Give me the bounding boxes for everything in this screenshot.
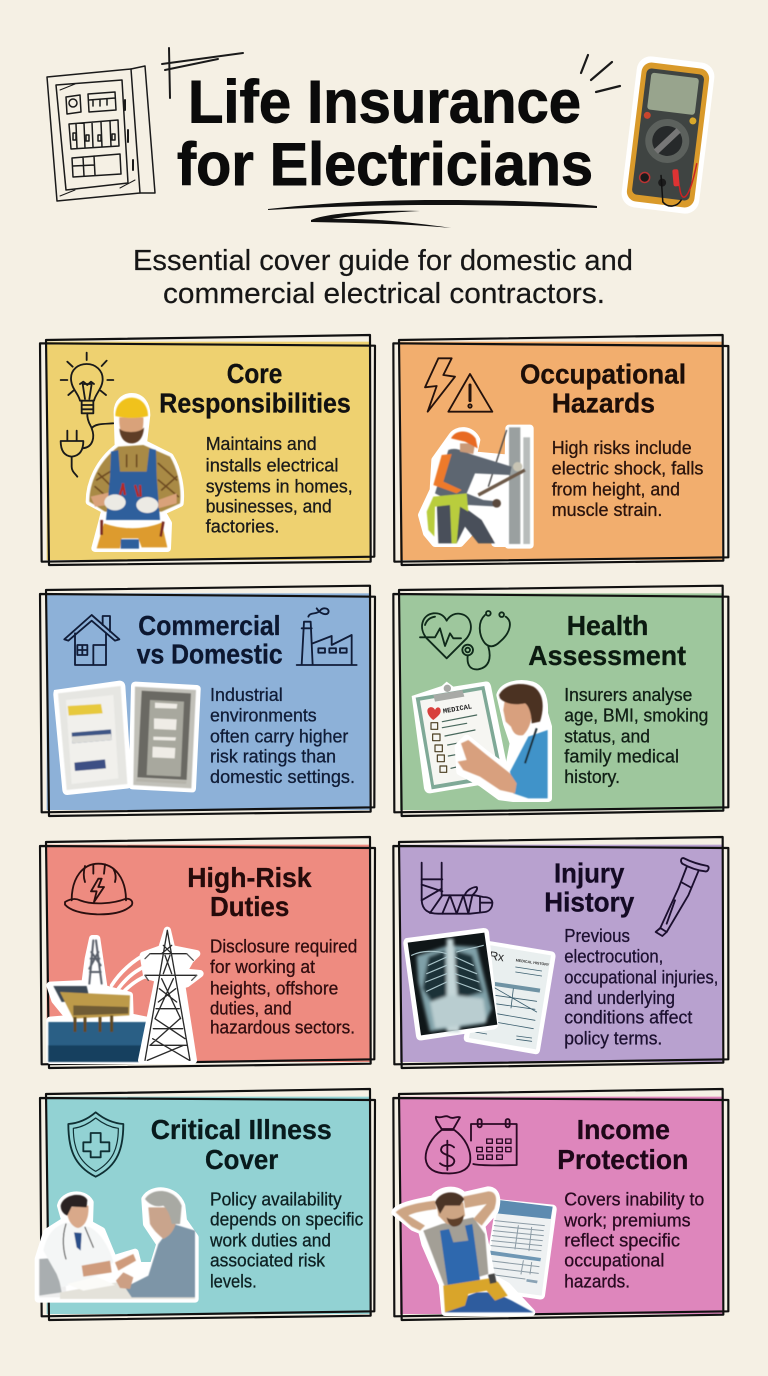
illustration: domestic consumer unit (53, 681, 132, 795)
body text: installs electrical (206, 455, 338, 475)
body text: Maintains and (206, 434, 317, 454)
heading: Hazards (552, 388, 655, 419)
body text: levels. (210, 1271, 257, 1291)
icon: money bag (426, 1116, 470, 1173)
body text: hazards. (564, 1271, 630, 1291)
icon: bandaged arm (422, 863, 492, 914)
body text: systems in homes, (206, 476, 353, 496)
illustration: doctor and patient sticker (38, 1191, 195, 1299)
icon: calendar (471, 1119, 517, 1165)
body text: status, and (564, 726, 650, 746)
body text: risk ratings than (210, 747, 336, 767)
panel: occupational hazards (393, 335, 728, 565)
body text: businesses, and (206, 496, 332, 516)
body text: age, BMI, smoking (564, 706, 708, 726)
underline stroke (268, 200, 597, 228)
heading: Duties (210, 891, 289, 922)
illustration: medical history form (464, 940, 556, 1054)
body text: history. (564, 767, 620, 787)
body text: environments (210, 706, 317, 726)
panel: health assessment (393, 586, 728, 816)
accent lines: title corner (162, 48, 243, 98)
illustration: medical clipboard (412, 682, 510, 793)
heading: Protection (557, 1144, 688, 1175)
body text: occupational (564, 1251, 664, 1271)
body text: often carry higher (210, 726, 348, 746)
body text: heights, offshore (210, 978, 338, 998)
body text: family medical (564, 747, 679, 767)
illustration: worker on pole sticker (422, 427, 530, 545)
body text: Insurers analyse (564, 685, 692, 705)
body text: conditions affect (564, 1008, 692, 1028)
illustration: pylon (142, 930, 200, 1060)
body text: Covers inability to (564, 1190, 704, 1210)
body text: and underlying (564, 988, 675, 1008)
illustration: electrician sticker (89, 397, 180, 549)
icon: light bulb and plug (61, 353, 113, 477)
clipboard label: MEDICAL (442, 703, 473, 716)
heading: Occupational (520, 358, 686, 389)
heading: Assessment (528, 640, 686, 671)
body text: Previous (564, 926, 630, 946)
icon: factory (297, 608, 357, 665)
body text: work duties and (209, 1230, 331, 1250)
body text: policy terms. (564, 1028, 662, 1048)
heading: Injury (554, 858, 625, 889)
panel: critical illness cover (38, 1089, 375, 1320)
body text: associated risk (210, 1251, 326, 1271)
subtitle: Essential cover guide for domestic and (133, 245, 633, 277)
body text: occupational injuries, (564, 968, 718, 988)
body text: depends on specific (210, 1210, 363, 1230)
body text: from height, and (552, 479, 680, 499)
body text: hazardous sectors. (210, 1018, 355, 1038)
body text: electrocution, (564, 947, 663, 967)
body text: reflect specific (564, 1231, 680, 1251)
illustration: resting electrician sticker (395, 1190, 533, 1312)
heading: Critical Illness (151, 1114, 332, 1145)
panel: core responsibilities (40, 335, 375, 565)
illustration: offshore oil rig (48, 939, 153, 1062)
icon: hard hat with bolt (65, 864, 132, 914)
illustration: rate sheet (482, 1199, 557, 1300)
heading: Core (227, 358, 282, 389)
prescription mark: Rx (489, 948, 505, 964)
body text: High risks include (552, 438, 692, 458)
heading: Income (577, 1114, 670, 1145)
body text: Policy availability (210, 1190, 342, 1210)
icon: lightning and warning triangle (425, 358, 492, 412)
title: Life Insurance (188, 68, 581, 136)
accent lines: spark (581, 55, 620, 92)
body text: domestic settings. (210, 767, 355, 787)
body text: factories. (206, 516, 279, 536)
panel: high-risk duties (40, 837, 375, 1068)
body text: duties, and (210, 999, 292, 1019)
subtitle: commercial electrical contractors. (163, 278, 605, 310)
icon: multimeter (620, 55, 716, 215)
heading: Responsibilities (159, 388, 351, 419)
heading: History (544, 886, 635, 917)
panel: injury history (393, 837, 728, 1068)
icon: heart and stethoscope (420, 611, 510, 669)
heading: vs Domestic (137, 638, 283, 669)
heading: Cover (205, 1144, 278, 1175)
body text: for working at (210, 957, 315, 977)
illustration: chest x-ray (403, 928, 498, 1040)
icon: house (64, 615, 119, 665)
header (47, 48, 716, 310)
body text: Industrial (210, 685, 283, 705)
body text: electric shock, falls (552, 459, 703, 479)
illustration: commercial distribution board (129, 682, 201, 792)
icon: shield with cross (68, 1112, 123, 1177)
heading: Health (567, 610, 648, 641)
body text: work; premiums (563, 1211, 691, 1231)
panel: commercial vs domestic (40, 586, 375, 816)
body text: muscle strain. (552, 500, 662, 520)
body text: Disclosure required (210, 937, 357, 957)
title: for Electricians (177, 131, 593, 198)
form heading: MEDICAL HISTORY (516, 958, 550, 967)
illustration: assessor man (458, 684, 548, 798)
icon: crutch (656, 858, 709, 936)
heading: Commercial (138, 610, 281, 641)
heading: High-Risk (187, 862, 312, 893)
icon: electrical panel sketch (47, 66, 155, 201)
panel: income protection (393, 1089, 728, 1320)
